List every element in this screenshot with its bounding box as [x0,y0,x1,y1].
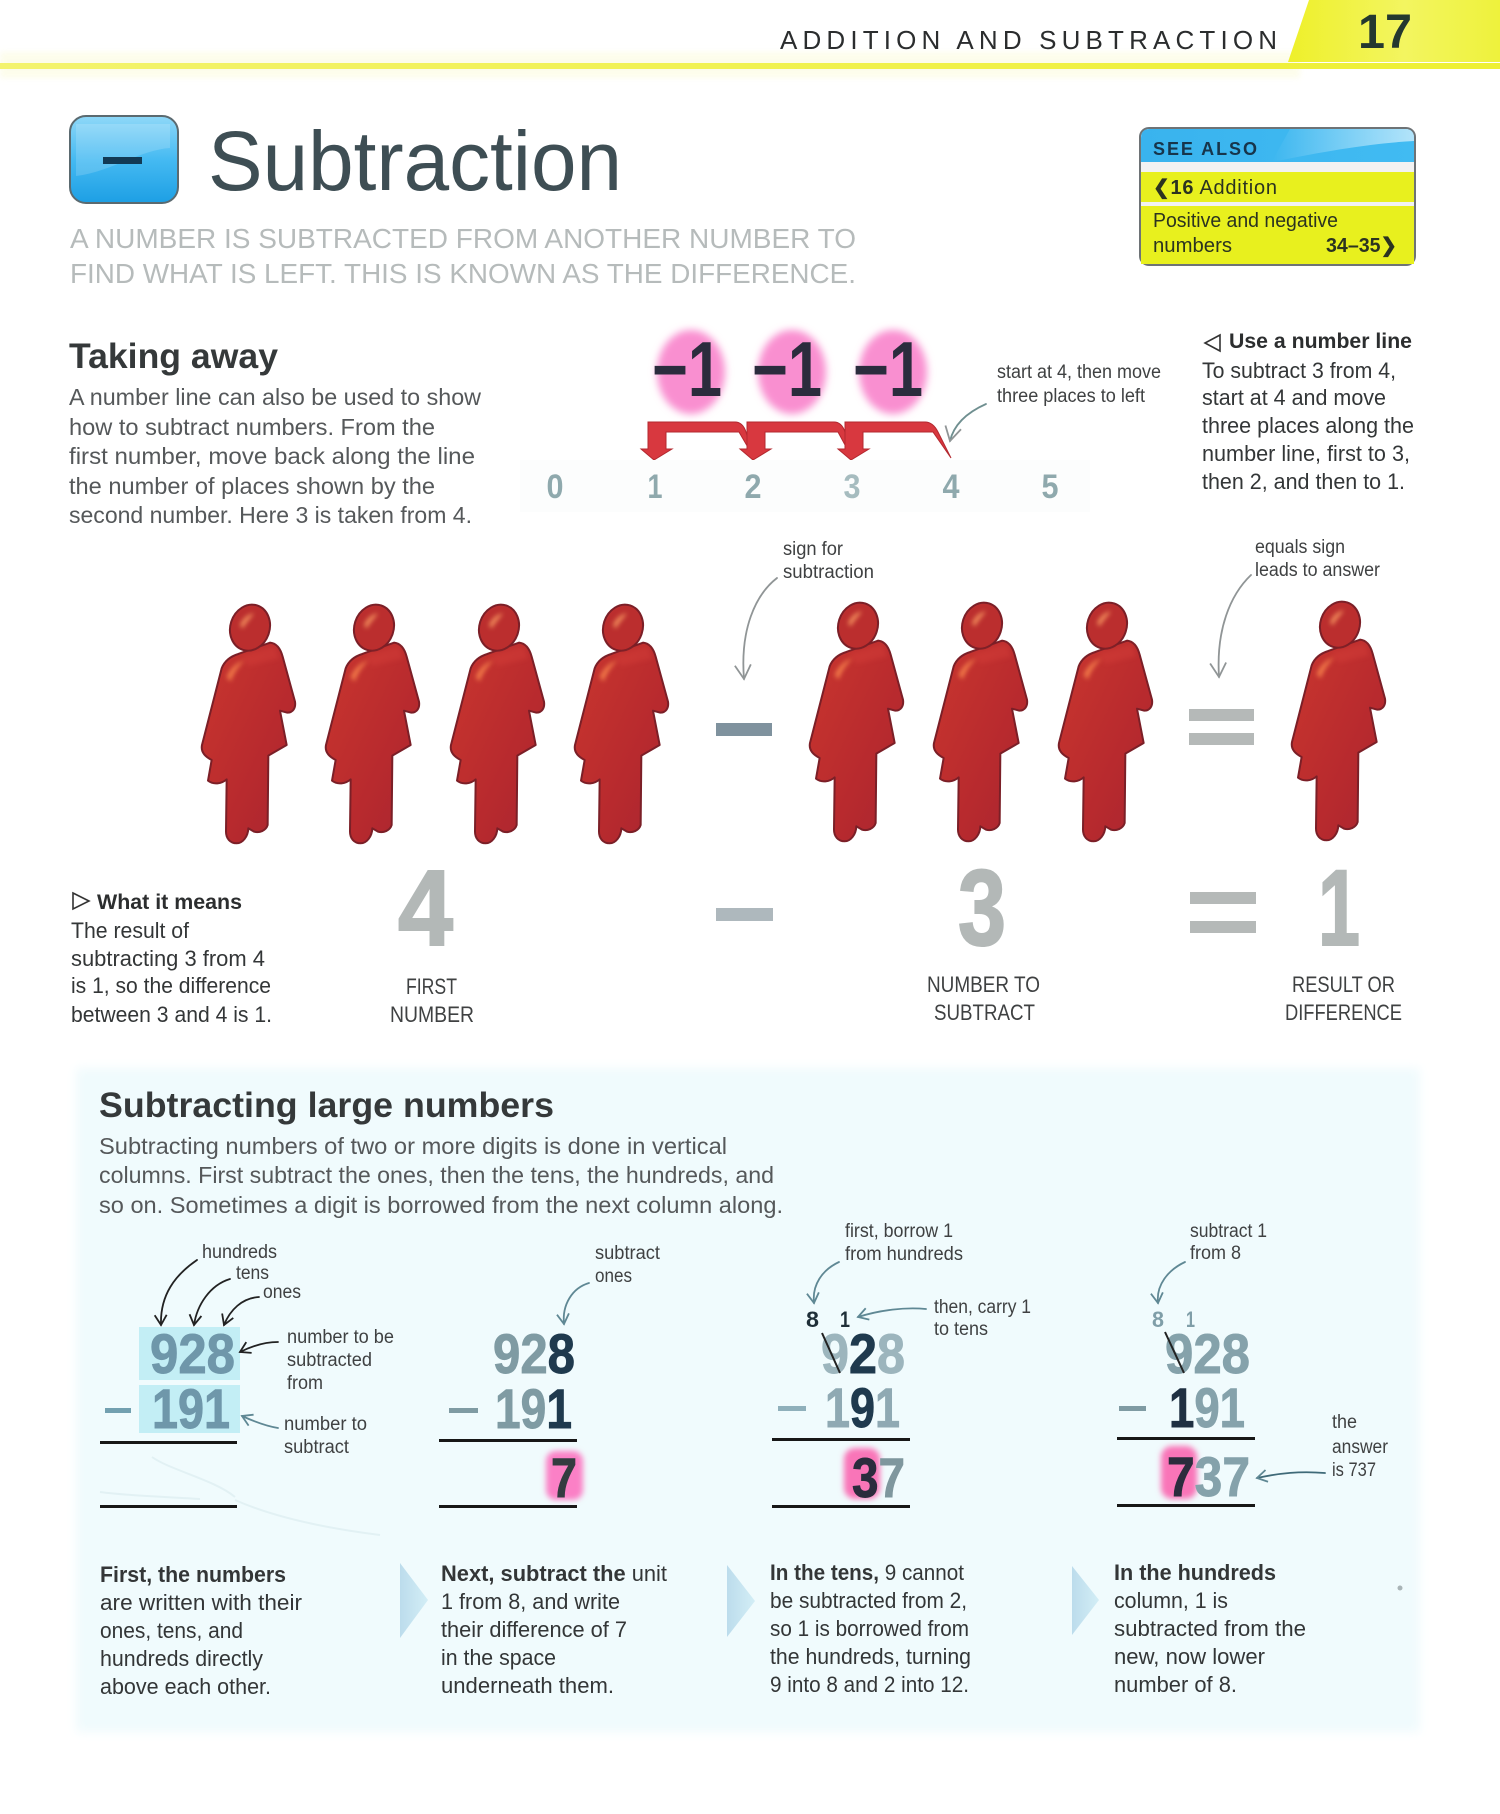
callout: what it means: The result of [71,918,190,943]
text block: step 4: In the hundreds [1114,1560,1276,1585]
digits 928: 928 [821,1322,905,1385]
text block: taking away: A number line can also be used to show [69,384,481,410]
label: subtract 1 from 8: subtract 1 [1190,1221,1267,1242]
answer digit 7: 7 [551,1446,577,1509]
callout: use a number line: then 2, and then to 1. [1202,469,1405,494]
link: positive and negative numbers: Positive and negative [1153,210,1338,232]
minus [105,1408,131,1413]
arrows: place values [161,1260,259,1325]
digits 191: 191 [495,1377,572,1440]
equals sign picture row [1189,709,1254,745]
number line digits [520,460,1090,512]
labels: hundreds tens ones: tens [236,1263,269,1284]
number line digits: 3 [844,468,860,506]
text block: step 2: Next, subtract the unit [441,1561,667,1586]
label: first borrow [814,1221,963,1303]
text block: taking away: second number. Here 3 is taken from 4. [69,502,472,528]
minus sign picture row [716,723,772,736]
link: positive and negative numbers: numbers [1153,235,1232,257]
heading: subtracting large numbers: Subtracting large numbers [99,1086,554,1125]
label: the answer is 737: is 737 [1332,1460,1376,1481]
intro text [70,223,856,289]
carried digits: 8 [1152,1307,1164,1332]
callout: use a number line: To subtract 3 from 4, [1202,358,1396,383]
text block: step 3 [770,1560,971,1697]
label: first number: NUMBER [390,1002,474,1027]
result: 1 [1318,847,1360,968]
text block: taking away: the number of places shown by the [69,473,435,499]
label: number to subtract: SUBTRACT [934,1000,1035,1025]
labels: hundreds tens ones: ones [263,1282,301,1303]
icon row: four figures [202,599,668,843]
text block: step 2 [441,1561,667,1698]
pink highlight [1161,1446,1197,1499]
label: then carry: then, carry 1 [934,1297,1031,1318]
minus [449,1408,478,1413]
label: subtract 1 from 8 [1158,1221,1267,1303]
label: number to be subtracted from: number to be [287,1327,394,1348]
equation numerals [398,847,1360,968]
label: the answer is 737: answer [1332,1437,1389,1458]
title: Subtraction [208,114,622,208]
annotation: equals sign [1219,537,1381,677]
column 3: the tens [772,1221,1031,1509]
strike through 9 [1165,1332,1184,1373]
text block: step 4 [1114,1560,1306,1697]
label: result or difference: DIFFERENCE [1285,1000,1402,1025]
answer lines [772,1438,910,1508]
link: positive and negative numbers [1153,210,1397,258]
callout: use a number line: start at 4 and move [1202,385,1386,410]
label: number to subtract: number to [284,1414,367,1435]
callout: what it means: is 1, so the difference [71,973,271,998]
label: number to subtract [242,1414,367,1458]
number line digits: 2 [744,468,762,506]
highlight boxes [139,1327,240,1433]
column 4: the hundreds: 1 [1186,1307,1195,1332]
annotation: sign for subtraction [743,539,874,679]
label: the answer is 737: the [1332,1412,1357,1433]
pink highlights [657,330,927,414]
label: the answer is 737 [1257,1412,1389,1481]
label: first borrow: first, borrow 1 [845,1221,953,1242]
annotation: sign for subtraction: subtraction [783,562,874,583]
number line digits: 5 [1042,468,1058,506]
icon: minus button [70,116,178,203]
text block: intro to large numbers [99,1133,783,1218]
text block: step 1: above each other. [100,1674,271,1699]
number line digits: 4 [942,468,960,506]
number line jumps [641,325,951,460]
label: subtract ones: subtract [595,1243,661,1264]
callout: what it means: What it means [97,891,242,914]
column 2: subtract the ones [439,1243,661,1509]
label: first number [390,974,474,1027]
minus one labels: −1 [652,325,722,413]
header band [0,0,1500,78]
column 3: the tens: 1 [840,1307,850,1332]
answer digits 737: 737 [1167,1445,1250,1508]
callout: what it means: between 3 and 4 is 1. [71,1002,272,1027]
label: number to subtract: NUMBER TO [927,972,1040,997]
text block: step 1: hundreds directly [100,1646,263,1671]
answer digits 37: 37 [852,1446,905,1509]
panel: subtracting large numbers [76,1068,1420,1732]
answer lines [100,1441,237,1508]
digits 191: 191 [825,1376,900,1439]
minus one labels [652,325,923,413]
text block: intro to large numbers: columns. First subtract the ones, then the tens, the hundreds, and [99,1162,774,1188]
minus sign [716,908,773,921]
minus one labels: −1 [752,325,822,413]
strike through 9 [822,1333,840,1373]
minus [778,1406,806,1411]
annotation: start at 4: start at 4, then move [997,362,1161,383]
label: subtract ones: ones [595,1266,632,1287]
number to subtract: 3 [958,847,1006,968]
page number: 17 [1358,6,1412,59]
text block: step 1: are written with their [100,1590,302,1615]
column 1: place values [100,1242,394,1508]
text block: step 1 [100,1562,302,1699]
column 4: the hundreds [1117,1221,1389,1508]
digits 928: 928 [1165,1322,1250,1385]
label: then carry: to tens [934,1319,988,1340]
text block: step 4: number of 8. [1114,1672,1237,1697]
icon row: three figures [810,597,1152,841]
callout: what it means [71,891,272,1027]
annotation: equals sign: equals sign [1255,537,1345,558]
callout: use a number line: three places along the [1202,413,1414,438]
arrow: to equals sign [1219,575,1251,677]
annotation: start at 4 [950,362,1161,441]
text block: step 4: new, now lower [1114,1644,1265,1669]
label: subtract 1 from 8: from 8 [1190,1243,1241,1264]
link: positive and negative numbers: 34–35❯ [1326,235,1397,258]
running head: ADDITION AND SUBTRACTION [780,25,1277,55]
text block: step 4: column, 1 is [1114,1588,1228,1613]
carried digits: 8 [806,1307,819,1332]
label: first borrow: from hundreds [845,1244,963,1265]
answer lines [439,1439,577,1508]
digits 191: 191 [1169,1376,1245,1439]
link: addition: ❮16 Addition [1153,177,1277,200]
text block: step 2: underneath them. [441,1673,614,1698]
callout: use a number line: number line, first to 3, [1202,441,1410,466]
arrow: step 1 to 2 [400,1563,428,1638]
text block: taking away [69,384,481,528]
text block: step 4: subtracted from the [1114,1616,1306,1641]
arrow: to number 4 [950,404,986,441]
pink highlight [844,1448,880,1499]
digits 191: 191 [152,1377,230,1440]
label: then carry [858,1297,1031,1340]
callout: use a number line [1202,330,1414,494]
label: number to subtract [927,972,1040,1025]
number line digits: 0 [546,468,564,506]
see also heading: SEE ALSO [1153,139,1257,159]
label: result or difference [1285,972,1402,1025]
number line digits: 1 [648,468,662,506]
text block: intro to large numbers: Subtracting numbers of two or more digits is done in vertical [99,1133,727,1159]
panel: see also [1140,128,1415,265]
text block: step 3: the hundreds, turning [770,1644,971,1669]
answer lines [1117,1437,1255,1507]
label: number to subtract: subtract [284,1437,350,1458]
label: first number: FIRST [406,974,457,999]
label: number to be subtracted from [240,1327,394,1394]
annotation: start at 4: three places to left [997,386,1146,407]
text block: intro to large numbers: so on. Sometimes a digit is borrowed from the next column along. [99,1192,783,1218]
label: number to be subtracted from: from [287,1373,323,1394]
intro text: FIND WHAT IS LEFT. THIS IS KNOWN AS THE DIFFERENCE. [70,258,856,289]
callout: use a number line: Use a number line [1229,330,1412,353]
first number: 4 [398,847,453,968]
text block: step 1: ones, tens, and [100,1618,243,1643]
arrow: step 2 to 3 [727,1565,755,1637]
label: subtract ones [564,1243,661,1324]
text block: step 3: In the tens, 9 cannot [770,1560,964,1585]
text block: taking away: first number, move back along the line [69,443,475,469]
annotation: sign for subtraction: sign for [783,539,844,560]
red jump arrows [641,422,951,460]
labels: hundreds tens ones [202,1242,301,1303]
callout: what it means: subtracting 3 from 4 [71,946,265,971]
section: taking away heading: Taking away [69,337,279,376]
digits 928: 928 [493,1322,575,1385]
intro text: A NUMBER IS SUBTRACTED FROM ANOTHER NUMBER TO [70,223,856,254]
minus one labels: −1 [853,325,923,413]
page tab [1288,0,1500,62]
arrow: to minus sign [743,578,777,679]
pink highlight [546,1451,583,1500]
label: result or difference: RESULT OR [1292,972,1395,997]
labels: hundreds tens ones: hundreds [202,1242,277,1263]
text block: step 2: their difference of 7 [441,1617,627,1642]
equals sign [1190,892,1256,933]
icon: result figure [1292,596,1385,840]
text block: step 2: in the space [441,1645,556,1670]
text block: step 3: so 1 is borrowed from [770,1616,969,1641]
arrow: step 3 to 4 [1072,1566,1099,1635]
text block: step 2: 1 from 8, and write [441,1589,620,1614]
text block: step 3: 9 into 8 and 2 into 12. [770,1672,969,1697]
annotation: equals sign: leads to answer [1255,560,1381,581]
digits 928: 928 [150,1322,235,1385]
minus [1119,1406,1146,1411]
text block: step 1: First, the numbers [100,1562,286,1587]
label: number to be subtracted from: subtracted [287,1350,372,1371]
text block: step 3: be subtracted from 2, [770,1588,967,1613]
text block: taking away: how to subtract numbers. From the [69,414,435,440]
yellow rule [0,63,1500,69]
